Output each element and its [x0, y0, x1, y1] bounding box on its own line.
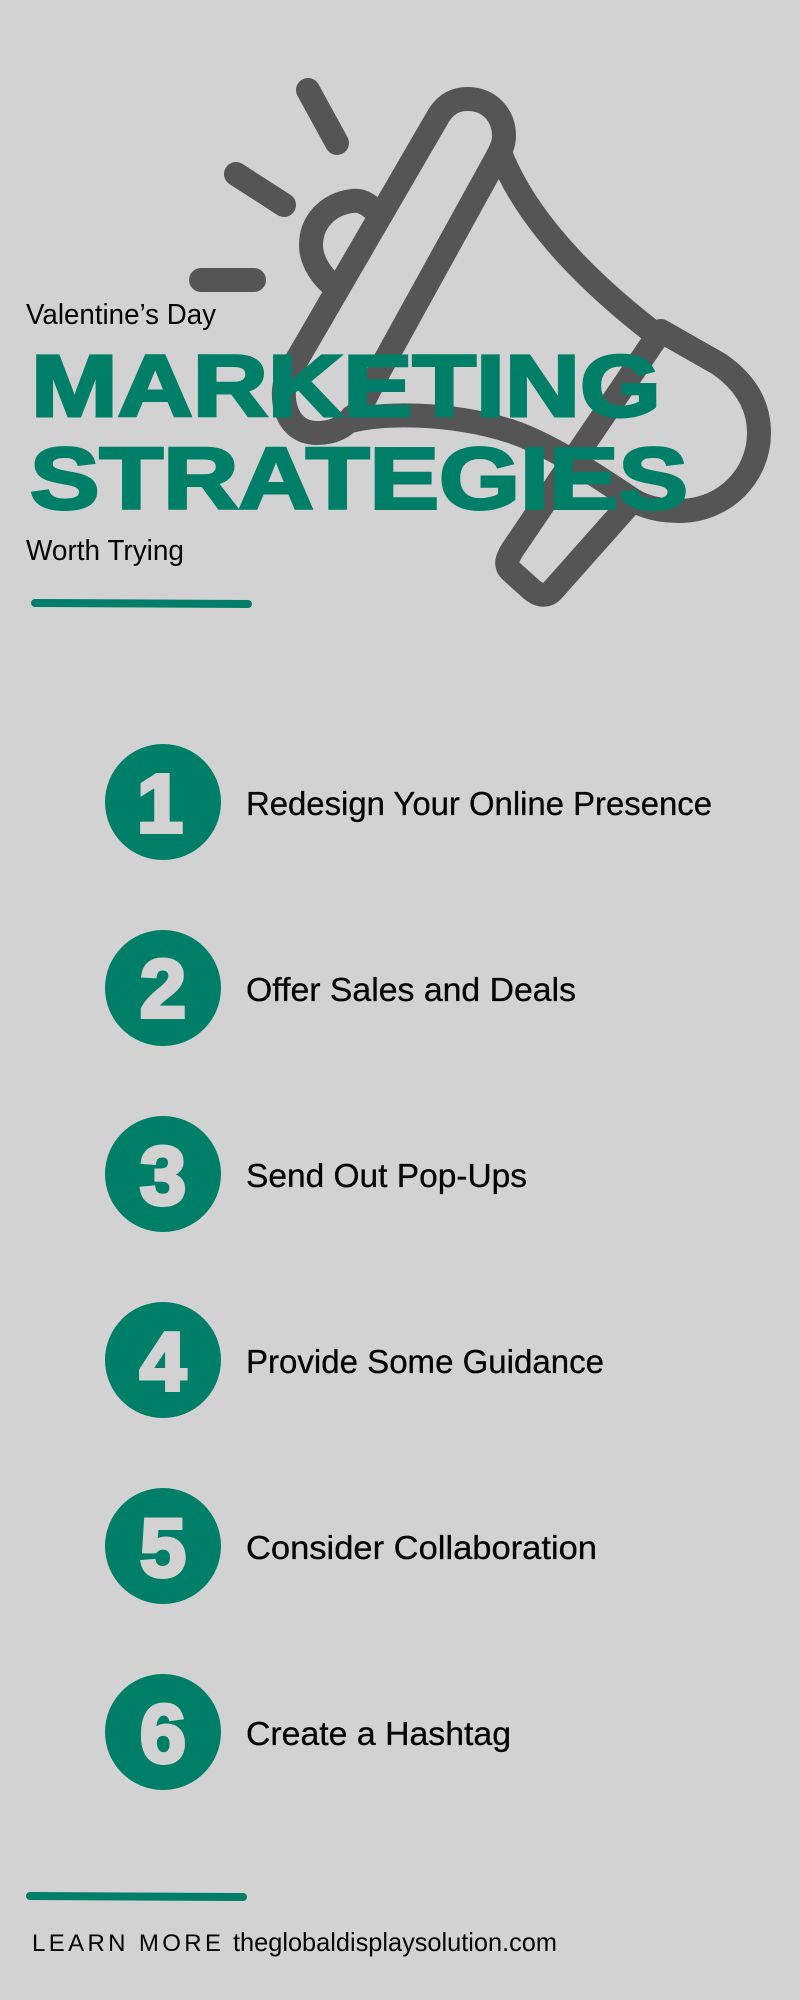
list item 4 — [105, 1302, 604, 1418]
item text 3: Send Out Pop-Ups — [246, 1157, 527, 1194]
list item 5 — [105, 1488, 597, 1604]
number badge 3 — [105, 1116, 221, 1232]
icon: megaphone tube — [284, 99, 504, 433]
icon: megaphone handle — [507, 335, 658, 595]
number badge 5: 5 — [140, 1501, 186, 1594]
icon: sound ray bottom — [201, 268, 254, 292]
list item 3 — [105, 1116, 527, 1232]
icon: megaphone — [201, 90, 759, 595]
list item 1 — [105, 744, 712, 860]
subtitle: Valentine's Day: Valentine’s Day — [26, 299, 216, 331]
title: STRATEGIES: STRATEGIES — [30, 430, 688, 528]
number badge 3: 3 — [140, 1129, 186, 1222]
icon: megaphone ear — [311, 201, 372, 284]
item text 5: Consider Collaboration — [246, 1529, 597, 1566]
number badge 2: 2 — [140, 942, 186, 1035]
number badge 6 — [105, 1674, 221, 1790]
subtitle: Worth Trying: Worth Trying — [26, 535, 184, 567]
footer: website: theglobaldisplaysolution.com — [233, 1927, 557, 1957]
footer: learn more: LEARN MORE — [32, 1930, 221, 1957]
number badge 2 — [105, 930, 221, 1046]
icon: sound ray top — [308, 90, 337, 143]
accent line top — [35, 603, 248, 604]
number badge 4 — [105, 1302, 221, 1418]
item text 2: Offer Sales and Deals — [246, 971, 576, 1008]
number badge 1: 1 — [137, 757, 183, 850]
icon: sound ray middle — [236, 174, 284, 205]
accent line bottom — [30, 1896, 243, 1897]
list item 2 — [105, 930, 576, 1046]
item text 4: Provide Some Guidance — [246, 1343, 604, 1380]
item text 6: Create a Hashtag — [246, 1715, 511, 1752]
number badge 5 — [105, 1488, 221, 1604]
item text 1: Redesign Your Online Presence — [246, 785, 712, 822]
icon: megaphone cone — [347, 155, 759, 511]
number badge 6: 6 — [140, 1687, 186, 1780]
list item 6 — [105, 1674, 511, 1790]
title: MARKETING: MARKETING — [31, 338, 661, 435]
number badge 1 — [105, 744, 221, 860]
number badge 4: 4 — [140, 1315, 186, 1408]
